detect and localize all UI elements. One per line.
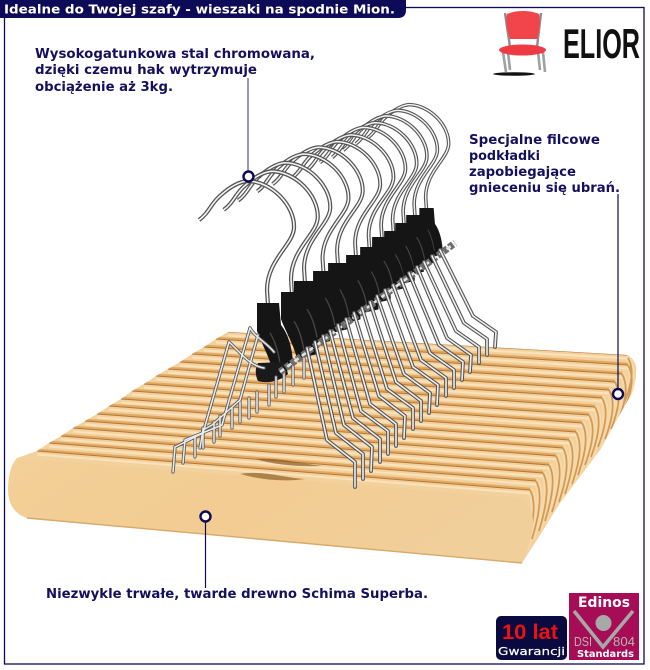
marker: [244, 172, 254, 182]
badge footer: Standards: [577, 649, 634, 660]
callout text: [35, 47, 315, 95]
emblem circle: [596, 615, 612, 631]
wood grain: [240, 459, 322, 480]
leader line: [617, 194, 619, 390]
wooden hanger stack: [8, 331, 636, 563]
badge: Edinos standards: [569, 593, 639, 660]
callout text: [469, 133, 620, 196]
marker: [200, 512, 210, 522]
leader line: [247, 78, 249, 172]
front hanger face: [8, 458, 533, 563]
badge title: Edinos: [578, 595, 630, 611]
callout text: obciążenie aż 3kg.: [35, 80, 173, 95]
callout text: dzięki czemu hak wytrzymuje: [35, 63, 257, 78]
emblem: [574, 611, 633, 647]
black clips: [256, 208, 443, 382]
callout text: Wysokogatunkowa stal chromowana,: [35, 47, 315, 62]
badge number: 10 lat: [502, 621, 558, 644]
title bar: [0, 0, 406, 18]
left wire legs: [173, 328, 304, 472]
product photo: wooden hangers: [8, 105, 636, 563]
DSI label: DSI: [574, 635, 592, 649]
hanger hooks: [199, 105, 449, 305]
leader line: [204, 520, 206, 588]
marker: [613, 389, 623, 399]
callout text: podkładki: [469, 149, 540, 164]
callout: felt pads: [469, 133, 623, 399]
callout text: Niezwykle trwałe, twarde drewno Schima Superba.: [46, 587, 428, 602]
badge label: Gwarancji: [498, 646, 565, 658]
callout: steel hook: [35, 47, 315, 182]
title: Idealne do Twojej szafy - wieszaki na spodnie Mion.: [4, 2, 395, 16]
badge: 10 year warranty: [496, 616, 567, 660]
callout text: zapobiegające: [469, 165, 576, 180]
logo: Elior: [493, 11, 640, 76]
callout text: gnieceniu się ubrań.: [469, 181, 620, 196]
callout: wood: [46, 512, 428, 602]
right wire legs: [307, 250, 496, 487]
icon: red chair: [493, 11, 546, 76]
804 label: 804: [613, 635, 635, 649]
front face lower edge: [27, 518, 522, 563]
wire rail: [280, 243, 455, 372]
callout text: Specjalne filcowe: [469, 133, 600, 148]
